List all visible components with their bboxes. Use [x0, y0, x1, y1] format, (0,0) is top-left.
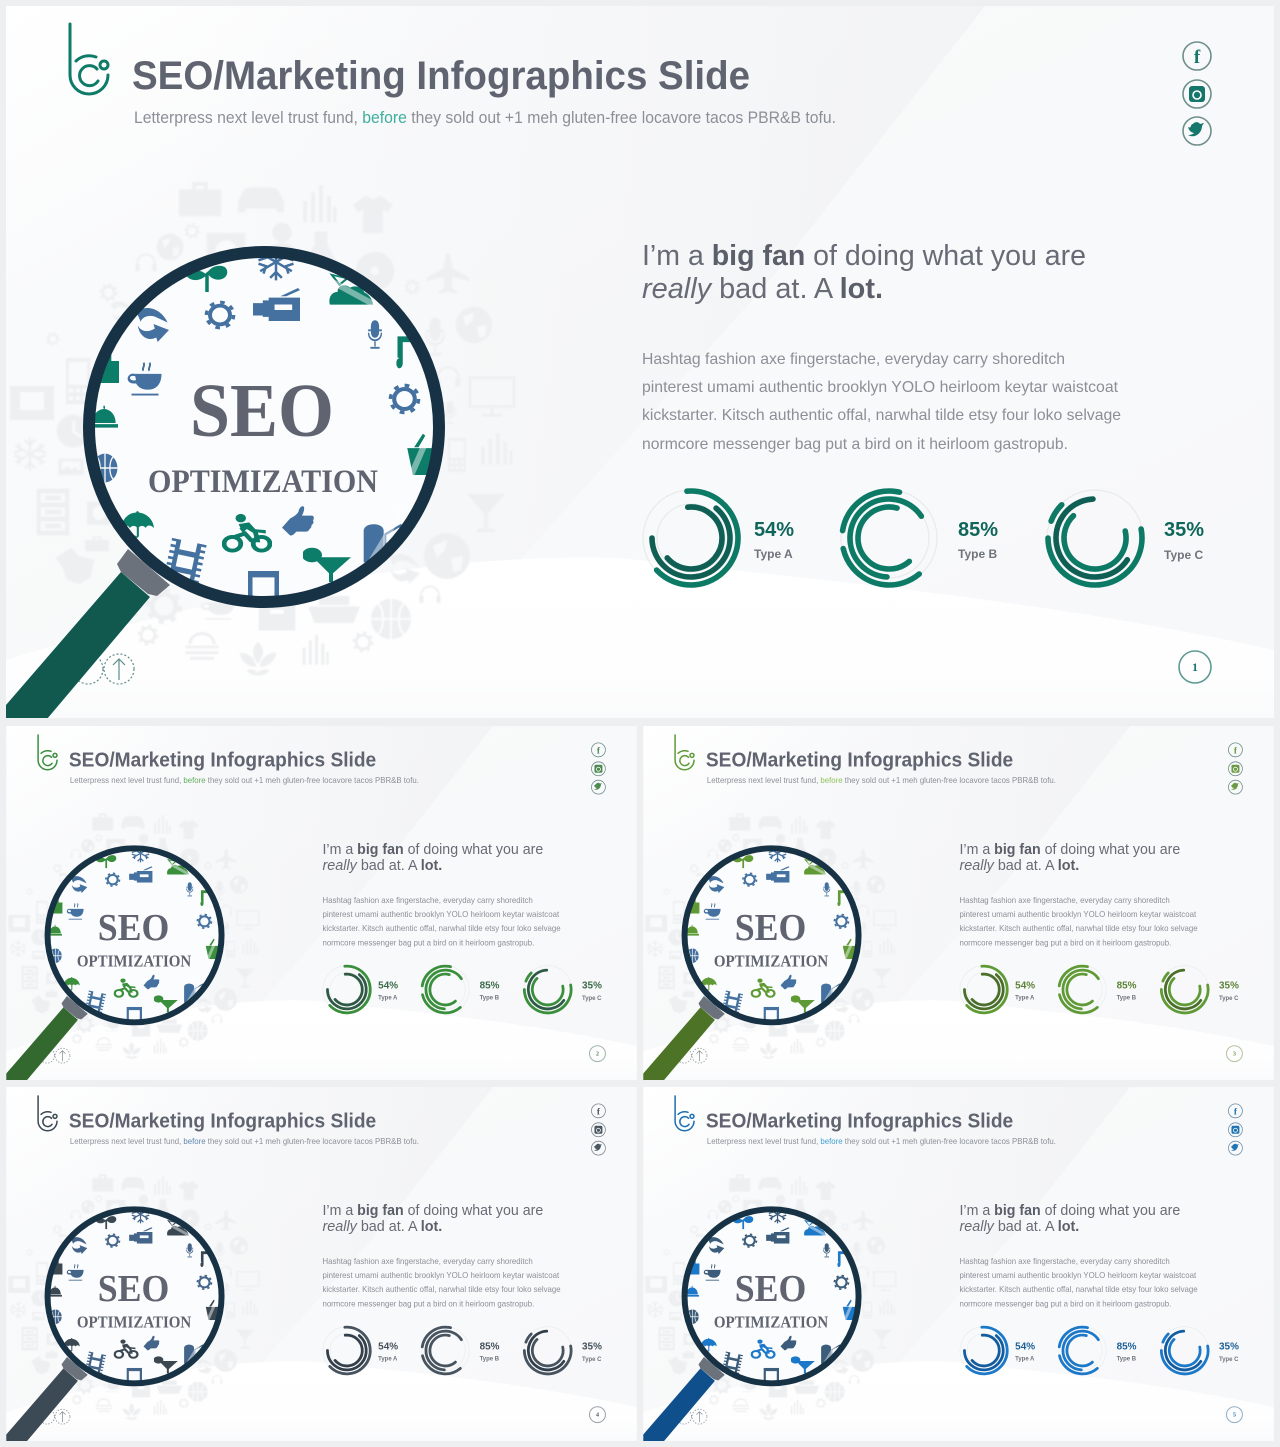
- ring chart: type B: [1049, 1318, 1137, 1383]
- body text: Hashtag fashion axe fingerstache, everyday carry shoreditch: [959, 1257, 1170, 1266]
- logo: [675, 735, 694, 770]
- ring chart: type A: [320, 962, 398, 1017]
- SEO label: SEO: [190, 369, 334, 453]
- ring chart: type C: [1155, 959, 1239, 1020]
- ring chart: type C: 35%: [1219, 1342, 1239, 1353]
- body text: Hashtag fashion axe fingerstache, everyday carry shoreditch: [322, 896, 533, 905]
- ring chart: type C: [1034, 477, 1204, 599]
- ring chart: type C: [518, 959, 602, 1020]
- ring chart: type B: 85%: [480, 1342, 500, 1353]
- ring chart: type B: Type B: [480, 995, 500, 1001]
- panel: green slide: [6, 726, 637, 1080]
- ring chart: type A: Type A: [1015, 995, 1035, 1001]
- lens icons: [48, 844, 219, 1021]
- ring chart: type A: Type A: [378, 1356, 398, 1362]
- magnifier handle: [643, 1007, 715, 1080]
- subtitle: Letterpress next level trust fund, before they sold out +1 meh gluten-free locavore tacos PBR&B tofu.: [70, 1137, 419, 1146]
- ring chart: type C: 35%: [1164, 519, 1204, 541]
- page number: [1226, 1046, 1242, 1062]
- ring chart: type B: [823, 472, 998, 604]
- body text: Hashtag fashion axe fingerstache, everyday carry shoreditch: [322, 1257, 533, 1266]
- body text: kickstarter. Kitsch authentic offal, narwhal tilde etsy four loko selvage: [959, 1285, 1198, 1294]
- page number: [1179, 651, 1211, 683]
- magnifier handle: [6, 1007, 78, 1080]
- ring chart: type C: Type C: [582, 1357, 602, 1363]
- heading line 2: really bad at. A lot.: [642, 273, 883, 305]
- heading line 2: really bad at. A lot.: [959, 858, 1079, 874]
- social icons: f: [1234, 1107, 1238, 1117]
- lens glass: [684, 848, 859, 1023]
- lens glass: [47, 848, 222, 1023]
- magnifier: [6, 844, 222, 1080]
- social icons: [1183, 42, 1211, 145]
- ring chart: type C: 35%: [1219, 981, 1239, 992]
- social icons: [1228, 1104, 1242, 1155]
- magnifier: [6, 1205, 222, 1441]
- body text: normcore messenger bag put a bird on it heirloom gastropub.: [959, 938, 1171, 947]
- social icons: f: [597, 1107, 601, 1117]
- optimization label: OPTIMIZATION: [148, 464, 378, 500]
- lens icons: [48, 1205, 219, 1382]
- ring chart: type C: [1155, 1320, 1239, 1381]
- page number: 5: [1233, 1413, 1236, 1419]
- magnifier collar: [698, 996, 725, 1019]
- body text: Hashtag fashion axe fingerstache, everyday carry shoreditch: [642, 351, 1065, 368]
- lens icons: [90, 244, 435, 599]
- lens ring: [685, 848, 859, 1022]
- social icons: [591, 743, 605, 794]
- ring chart: type B: Type B: [958, 547, 997, 561]
- body text: kickstarter. Kitsch authentic offal, narwhal tilde etsy four loko selvage: [959, 924, 1198, 933]
- ring chart: type A: 54%: [378, 1342, 398, 1353]
- lens glass: [684, 1209, 859, 1384]
- ring chart: type B: Type B: [480, 1356, 500, 1362]
- body text: Hashtag fashion axe fingerstache, everyday carry shoreditch: [959, 896, 1170, 905]
- ring chart: type A: Type A: [754, 547, 793, 561]
- heading: I’m a big fan of doing what you are: [959, 1203, 1180, 1219]
- lens ring: [685, 1209, 859, 1383]
- ring chart: type B: 85%: [1117, 981, 1137, 992]
- magnifier handle: [6, 1368, 78, 1441]
- social icons: f: [1234, 746, 1238, 756]
- ring chart: type B: [1049, 957, 1137, 1022]
- subtitle: Letterpress next level trust fund, before they sold out +1 meh gluten-free locavore tacos PBR&B tofu.: [707, 1137, 1056, 1146]
- up arrow buttons: [677, 1048, 707, 1063]
- up arrow buttons: [677, 1409, 707, 1424]
- ring chart: type C: Type C: [1219, 1357, 1239, 1363]
- subtitle: Letterpress next level trust fund, before they sold out +1 meh gluten-free locavore tacos PBR&B tofu.: [70, 776, 419, 785]
- SEO label: SEO: [735, 1268, 806, 1310]
- magnifier collar: [698, 1357, 725, 1380]
- lens ring: [89, 252, 439, 602]
- title: SEO/Marketing Infographics Slide: [706, 1110, 1013, 1132]
- heading line 2: really bad at. A lot.: [959, 1219, 1079, 1235]
- ring chart: type B: Type B: [1117, 995, 1137, 1001]
- page number: 2: [596, 1052, 599, 1058]
- ring chart: type A: [636, 483, 794, 593]
- up arrow buttons: [40, 1409, 70, 1424]
- body text: kickstarter. Kitsch authentic offal, narwhal tilde etsy four loko selvage: [322, 924, 561, 933]
- background icon cloud: [8, 1174, 259, 1420]
- ring chart: type A: [320, 1323, 398, 1378]
- up arrow buttons: [40, 1048, 70, 1063]
- body text: pinterest umami authentic brooklyn YOLO heirloom keytar waistcoat: [959, 910, 1197, 919]
- ring chart: type C: 35%: [582, 1342, 602, 1353]
- ring chart: type C: Type C: [1164, 548, 1203, 562]
- ring chart: type A: Type A: [1015, 1356, 1035, 1362]
- social icons: f: [1194, 47, 1201, 68]
- ring chart: type A: 54%: [1015, 981, 1035, 992]
- page number: [589, 1046, 605, 1062]
- optimization label: OPTIMIZATION: [714, 952, 828, 971]
- body text: pinterest umami authentic brooklyn YOLO heirloom keytar waistcoat: [322, 910, 560, 919]
- magnifier collar: [61, 996, 88, 1019]
- body text: normcore messenger bag put a bird on it heirloom gastropub.: [959, 1299, 1171, 1308]
- title: SEO/Marketing Infographics Slide: [69, 1110, 376, 1132]
- body text: [959, 1257, 1198, 1308]
- social icons: f: [597, 746, 601, 756]
- logo: [70, 24, 108, 94]
- ring chart: type B: Type B: [1117, 1356, 1137, 1362]
- ring chart: type C: [518, 1320, 602, 1381]
- magnifier: [643, 1205, 859, 1441]
- magnifier: [643, 844, 859, 1080]
- title: SEO/Marketing Infographics Slide: [69, 749, 376, 771]
- social icons: [1228, 743, 1242, 794]
- magnifier: [6, 244, 440, 719]
- body text: [959, 896, 1198, 947]
- body text: pinterest umami authentic brooklyn YOLO heirloom keytar waistcoat: [959, 1271, 1197, 1280]
- magnifier handle: [6, 572, 150, 719]
- panel: blue slide: [643, 1087, 1274, 1441]
- body text: normcore messenger bag put a bird on it heirloom gastropub.: [322, 938, 534, 947]
- heading: I’m a big fan of doing what you are: [642, 240, 1086, 272]
- magnifier collar: [61, 1357, 88, 1380]
- ring chart: type A: 54%: [1015, 1342, 1035, 1353]
- magnifier collar: [117, 549, 170, 596]
- panel: slate slide: [6, 1087, 637, 1441]
- ring chart: type A: 54%: [754, 519, 794, 541]
- body text: [322, 1257, 561, 1308]
- title: SEO/Marketing Infographics Slide: [132, 54, 750, 98]
- lens icons: [685, 844, 856, 1021]
- ring chart: type C: Type C: [1219, 996, 1239, 1002]
- lens glass: [47, 1209, 222, 1384]
- heading: I’m a big fan of doing what you are: [322, 1203, 543, 1219]
- ring chart: type B: 85%: [1117, 1342, 1137, 1353]
- background icon cloud: [8, 813, 259, 1059]
- heading line 2: really bad at. A lot.: [322, 1219, 442, 1235]
- subtitle: Letterpress next level trust fund, before they sold out +1 meh gluten-free locavore tacos PBR&B tofu.: [134, 109, 836, 127]
- panel: main teal slide: [6, 6, 1274, 718]
- background icon cloud: [10, 182, 514, 675]
- ring chart: type A: [957, 962, 1035, 1017]
- SEO label: SEO: [98, 907, 169, 949]
- ring chart: type B: [412, 957, 500, 1022]
- magnifier handle: [643, 1368, 715, 1441]
- logo: [38, 735, 57, 770]
- social icons: [591, 1104, 605, 1155]
- body text: pinterest umami authentic brooklyn YOLO heirloom keytar waistcoat: [322, 1271, 560, 1280]
- body text: [642, 351, 1121, 453]
- lens ring: [48, 1209, 222, 1383]
- subtitle: Letterpress next level trust fund, before they sold out +1 meh gluten-free locavore tacos PBR&B tofu.: [707, 776, 1056, 785]
- page number: 3: [1233, 1052, 1236, 1058]
- body text: [322, 896, 561, 947]
- ring chart: type A: 54%: [378, 981, 398, 992]
- optimization label: OPTIMIZATION: [714, 1313, 828, 1332]
- page number: [1226, 1407, 1242, 1423]
- ring chart: type B: 85%: [958, 519, 998, 541]
- body text: normcore messenger bag put a bird on it heirloom gastropub.: [322, 1299, 534, 1308]
- up arrow buttons: [73, 654, 134, 684]
- lens glass: [88, 251, 440, 603]
- SEO label: SEO: [735, 907, 806, 949]
- lens icons: [685, 1205, 856, 1382]
- optimization label: OPTIMIZATION: [77, 1313, 191, 1332]
- SEO label: SEO: [98, 1268, 169, 1310]
- ring chart: type B: 85%: [480, 981, 500, 992]
- heading: I’m a big fan of doing what you are: [959, 842, 1180, 858]
- page number: [589, 1407, 605, 1423]
- body text: normcore messenger bag put a bird on it heirloom gastropub.: [642, 436, 1068, 453]
- heading line 2: really bad at. A lot.: [322, 858, 442, 874]
- page number: 4: [596, 1413, 599, 1419]
- logo: [38, 1096, 57, 1131]
- logo: [675, 1096, 694, 1131]
- body text: kickstarter. Kitsch authentic offal, narwhal tilde etsy four loko selvage: [322, 1285, 561, 1294]
- body text: kickstarter. Kitsch authentic offal, narwhal tilde etsy four loko selvage: [642, 407, 1121, 424]
- body text: pinterest umami authentic brooklyn YOLO heirloom keytar waistcoat: [642, 379, 1119, 396]
- background icon cloud: [645, 813, 896, 1059]
- ring chart: type B: [412, 1318, 500, 1383]
- ring chart: type C: 35%: [582, 981, 602, 992]
- page number: 1: [1192, 660, 1198, 674]
- panel: olive slide: [643, 726, 1274, 1080]
- optimization label: OPTIMIZATION: [77, 952, 191, 971]
- background icon cloud: [645, 1174, 896, 1420]
- lens ring: [48, 848, 222, 1022]
- heading: I’m a big fan of doing what you are: [322, 842, 543, 858]
- ring chart: type A: [957, 1323, 1035, 1378]
- ring chart: type A: Type A: [378, 995, 398, 1001]
- ring chart: type C: Type C: [582, 996, 602, 1002]
- title: SEO/Marketing Infographics Slide: [706, 749, 1013, 771]
